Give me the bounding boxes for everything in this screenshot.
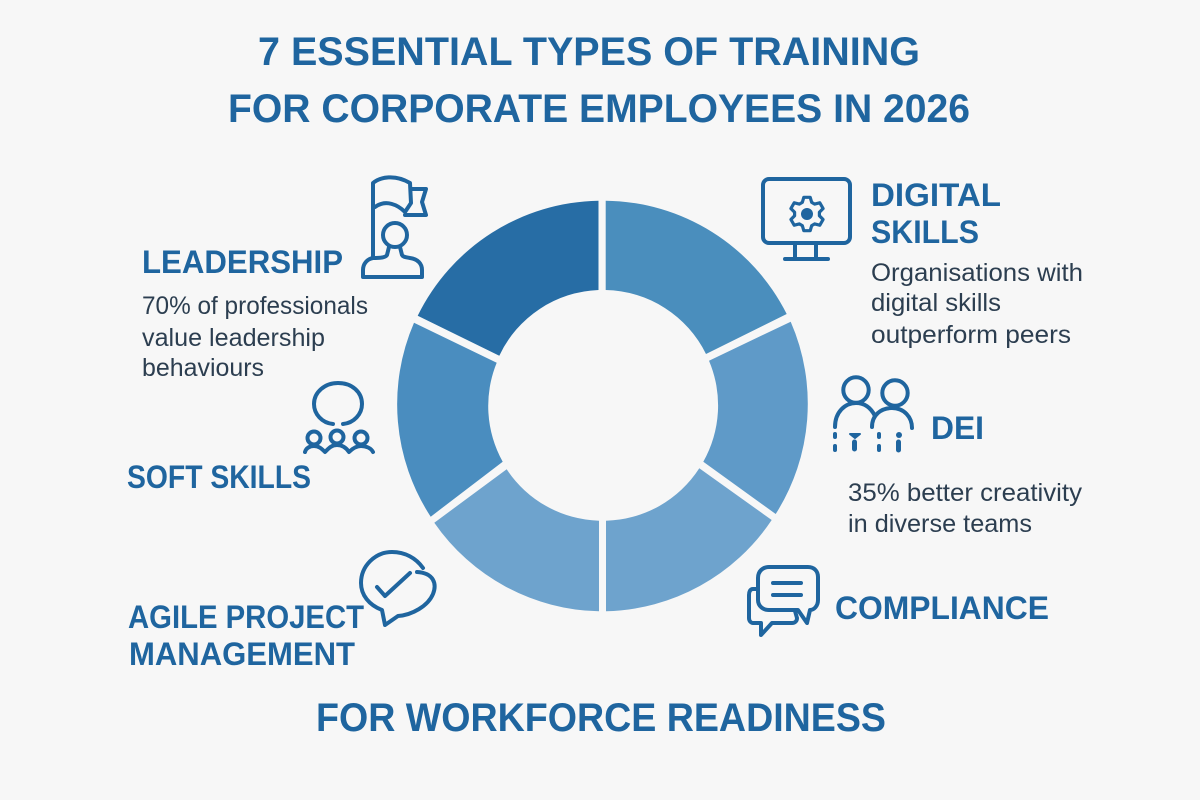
donut chart bbox=[397, 201, 808, 611]
label: digital skills bbox=[871, 177, 1083, 349]
label: agile project management bbox=[128, 599, 364, 672]
label: soft skills: SOFT SKILLS bbox=[127, 459, 311, 495]
text: leadership stat bbox=[142, 292, 368, 382]
label: digital skills: SKILLS bbox=[871, 214, 979, 250]
label: compliance: COMPLIANCE bbox=[835, 590, 1049, 626]
title: 7 ESSENTIAL TYPES OF TRAINING bbox=[258, 30, 920, 74]
text: digital skills stat: Organisations with bbox=[871, 259, 1083, 287]
label: digital skills: DIGITAL bbox=[871, 177, 1001, 213]
footer heading: FOR WORKFORCE READINESS bbox=[316, 696, 886, 740]
label: agile project management: MANAGEMENT bbox=[129, 636, 355, 672]
segment: top left bbox=[418, 201, 598, 356]
text: digital skills stat bbox=[871, 259, 1083, 349]
text: DEI stat: in diverse teams bbox=[848, 510, 1032, 538]
text: leadership stat: 70% of professionals bbox=[142, 292, 368, 320]
label: leadership bbox=[142, 244, 368, 382]
icon: leader with flag bbox=[363, 177, 426, 277]
text: leadership stat: behaviours bbox=[142, 354, 264, 382]
text: digital skills stat: digital skills bbox=[871, 289, 1001, 317]
label: DEI bbox=[848, 410, 1083, 538]
title: FOR CORPORATE EMPLOYEES IN 2026 bbox=[228, 87, 970, 131]
icon: chat bubbles bbox=[749, 567, 818, 635]
segment: bottom right bbox=[606, 468, 772, 611]
icon: speech bubble with check bbox=[361, 552, 435, 625]
segment: left bbox=[397, 323, 503, 517]
text: DEI stat bbox=[848, 479, 1083, 538]
label: agile project management: AGILE PROJECT bbox=[128, 599, 364, 635]
icon: group with speech circle bbox=[305, 383, 373, 452]
text: DEI stat: 35% better creativity bbox=[848, 479, 1083, 507]
segment: right bbox=[703, 322, 808, 514]
icon: two people bbox=[835, 377, 912, 450]
text: leadership stat: value leadership bbox=[142, 324, 325, 352]
text: digital skills stat: outperform peers bbox=[871, 321, 1071, 349]
title bbox=[228, 30, 970, 131]
icon: monitor with gear bbox=[763, 179, 850, 259]
segment: top right bbox=[606, 201, 787, 354]
segment: bottom left bbox=[434, 469, 599, 611]
label: leadership: LEADERSHIP bbox=[142, 244, 343, 280]
label: DEI: DEI bbox=[931, 410, 984, 446]
